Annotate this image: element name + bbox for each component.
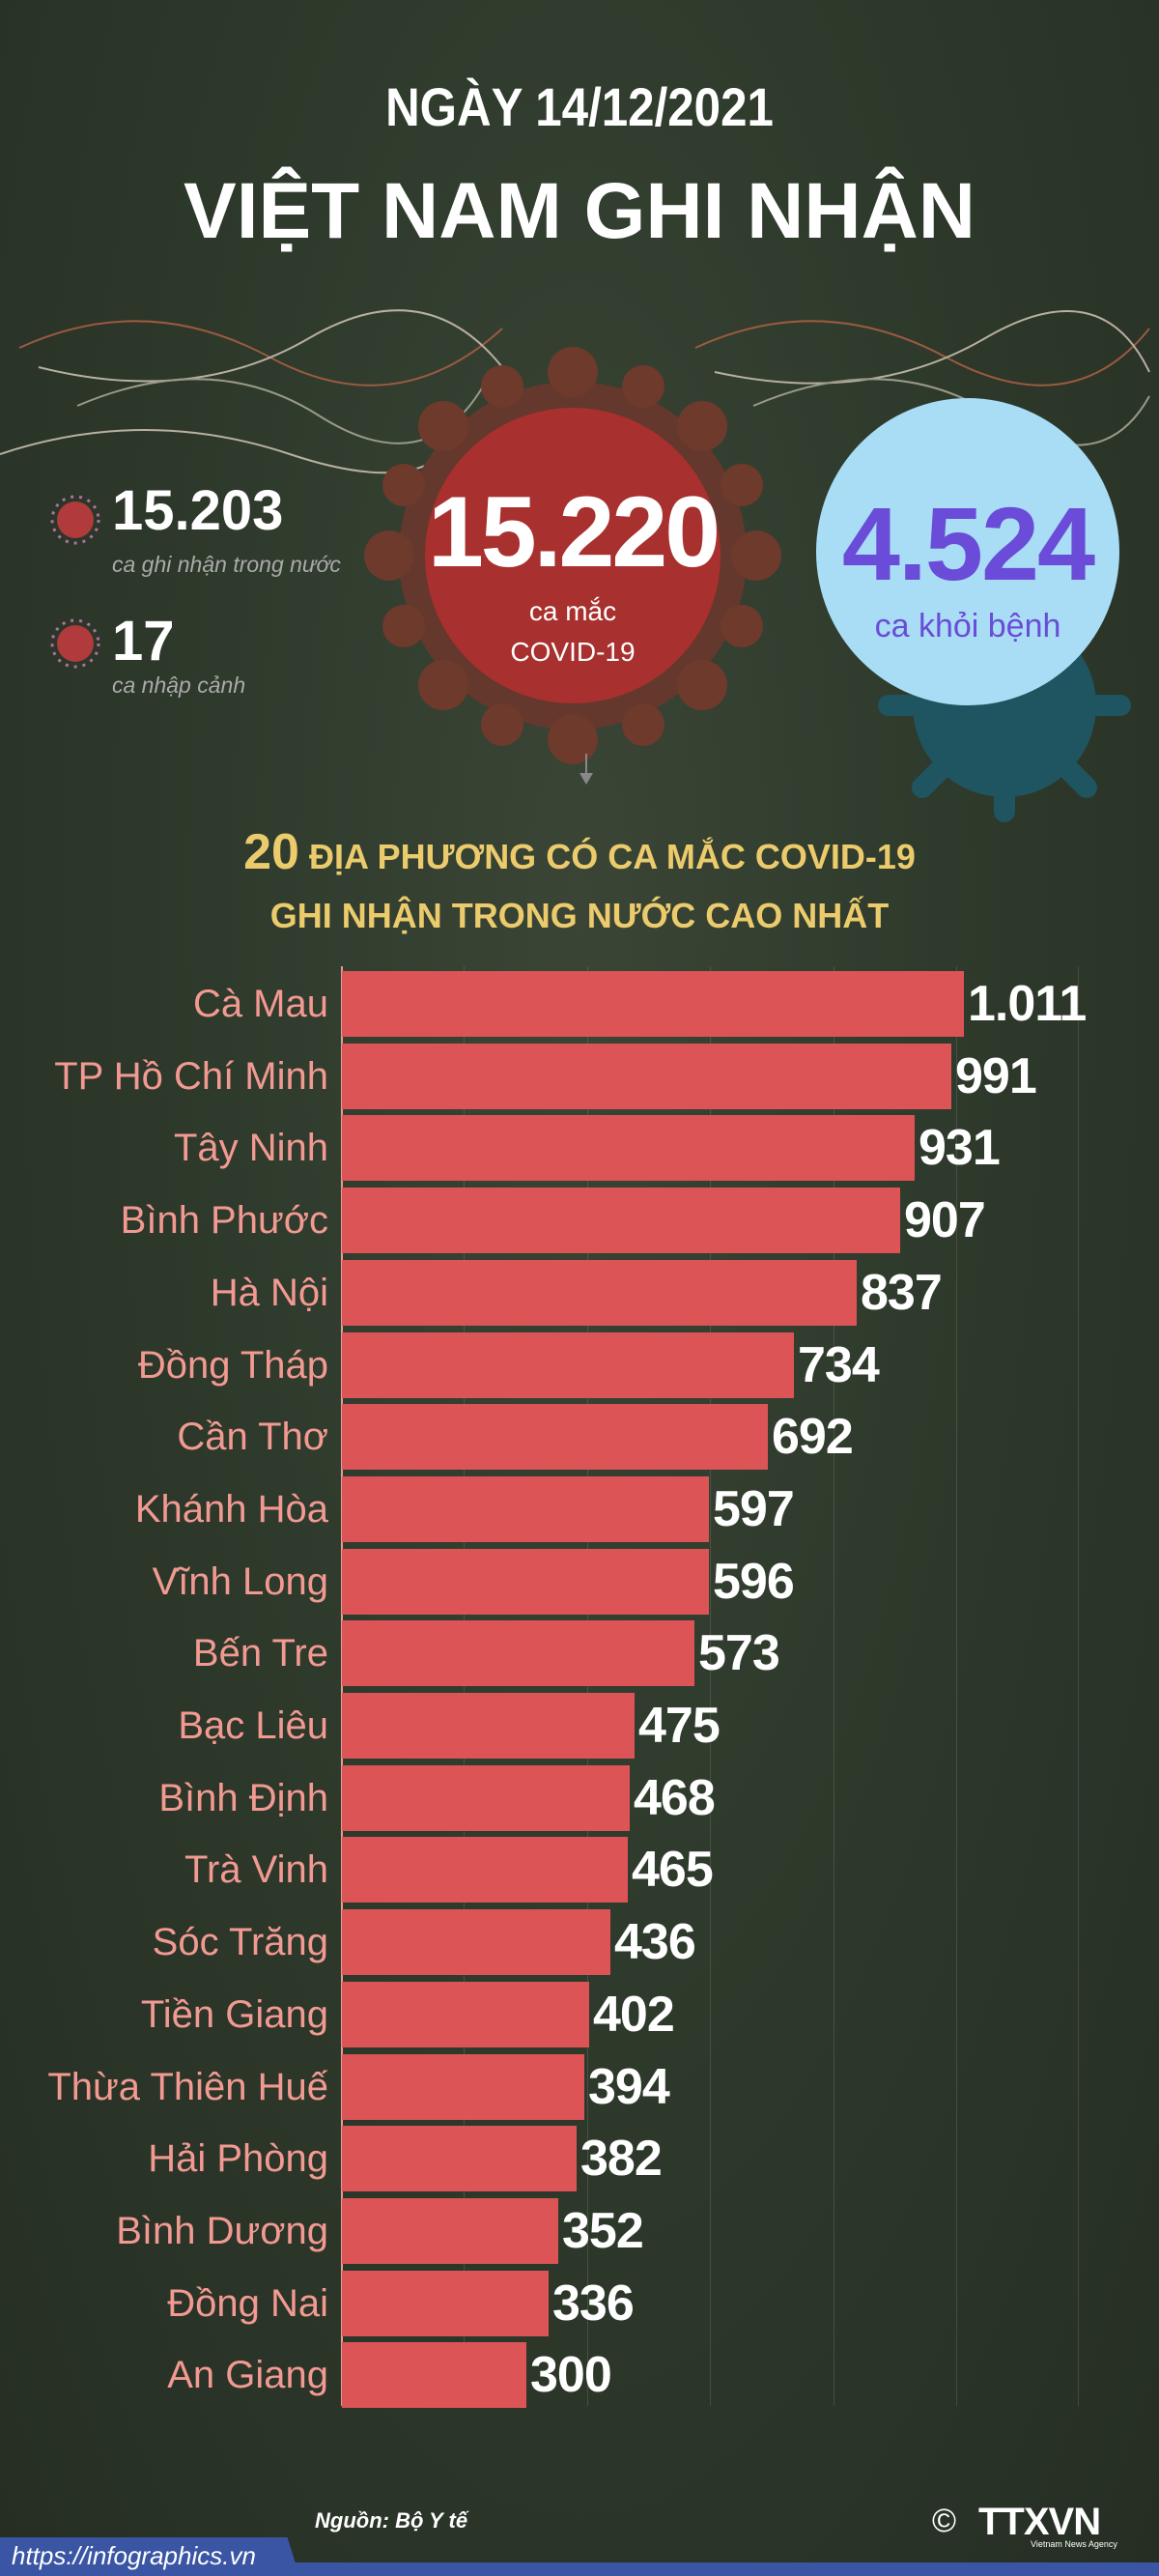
icon: small virus: [50, 495, 100, 545]
title: main: VIỆT NAM GHI NHẬN: [184, 167, 975, 255]
bar chart: Vĩnh Long: [153, 1560, 328, 1602]
footer url tab: https://infographics.vn: [12, 2541, 256, 2570]
icon: brown virus behind red circle: [364, 347, 781, 764]
bar chart: Bình Phước: [121, 1198, 328, 1241]
bar chart: 300: [530, 2347, 611, 2403]
bar chart: 692: [772, 1409, 853, 1465]
circle: recovered: ca khỏi bệnh: [875, 608, 1060, 644]
bar chart: 382: [580, 2131, 662, 2187]
circle: total cases: 15.220: [428, 476, 718, 588]
bar chart: Bình Định: [158, 1776, 328, 1818]
source note: Nguồn: Bộ Y tế: [315, 2508, 467, 2533]
bar chart: 597: [713, 1481, 794, 1537]
logo: TTXVN: TTXVN: [978, 2501, 1100, 2543]
circle: recovered: [816, 398, 1119, 705]
bar chart: 1.011: [968, 976, 1086, 1032]
logo: TTXVN: ©: [932, 2503, 956, 2539]
footer bar: [0, 2562, 1159, 2576]
bar chart: 336: [552, 2275, 634, 2332]
bar chart: Cà Mau: [193, 982, 328, 1024]
bar chart: 394: [588, 2059, 669, 2115]
bar chart: 907: [904, 1192, 985, 1248]
chart heading: 20 ĐỊA PHƯƠNG CÓ CA MẮC COVID-19: [243, 824, 916, 880]
bar chart: 837: [861, 1265, 942, 1321]
stat: domestic cases: [50, 479, 341, 577]
bar chart: 468: [634, 1770, 715, 1826]
bar chart: 352: [562, 2203, 643, 2259]
bar chart: Cần Thơ: [177, 1415, 328, 1457]
bar chart: Thừa Thiên Huế: [47, 2066, 328, 2108]
bar chart: 475: [638, 1698, 720, 1754]
bar chart: Bình Dương: [116, 2209, 328, 2251]
bar chart: Đồng Nai: [167, 2282, 328, 2325]
logo: TTXVN: Vietnam News Agency: [1031, 2539, 1117, 2549]
bar chart: Khánh Hòa: [135, 1488, 328, 1531]
circle: recovered: 4.524: [842, 485, 1093, 602]
bar chart: 931: [919, 1120, 1000, 1176]
logo: TTXVN: [932, 2501, 1117, 2549]
bar chart: 436: [614, 1914, 695, 1970]
bar chart: 573: [698, 1625, 779, 1681]
bar chart: Tiền Giang: [141, 1992, 328, 2035]
text: GHI NHẬN TRONG NƯỚC CAO NHẤT: [270, 896, 889, 935]
bar chart: [47, 966, 1086, 2408]
circle: total cases: [425, 408, 721, 703]
bar chart: Đồng Tháp: [138, 1343, 328, 1386]
bar chart: TP Hồ Chí Minh: [54, 1055, 328, 1098]
bar chart: Trà Vinh: [184, 1847, 328, 1890]
bar chart: 465: [632, 1842, 713, 1898]
stat: domestic cases: 15.203: [112, 479, 283, 542]
bar chart: Hà Nội: [211, 1272, 328, 1314]
stat: domestic cases: ca ghi nhận trong nước: [112, 552, 341, 577]
circle: total cases: ca mắc: [529, 596, 616, 626]
bar chart: 991: [955, 1048, 1036, 1104]
bar chart: Sóc Trăng: [153, 1921, 328, 1963]
icon: teal virus behind blue circle: [889, 589, 1120, 812]
bar chart: An Giang: [167, 2354, 328, 2396]
bar chart: 402: [593, 1987, 674, 2043]
stat: imported cases: ca nhập cảnh: [112, 673, 245, 698]
icon: small virus: [50, 618, 100, 669]
bar chart: Bạc Liêu: [178, 1704, 328, 1747]
bar chart: Tây Ninh: [174, 1127, 328, 1169]
bar chart: Hải Phòng: [148, 2137, 328, 2180]
title: date: NGÀY 14/12/2021: [385, 76, 774, 137]
stat: imported cases: 17: [112, 610, 175, 673]
circle: total cases: COVID-19: [510, 637, 636, 667]
bar chart: 596: [713, 1554, 794, 1610]
bar chart: 734: [798, 1337, 879, 1393]
bar chart: Bến Tre: [193, 1631, 328, 1674]
stat: imported cases: [50, 610, 245, 698]
